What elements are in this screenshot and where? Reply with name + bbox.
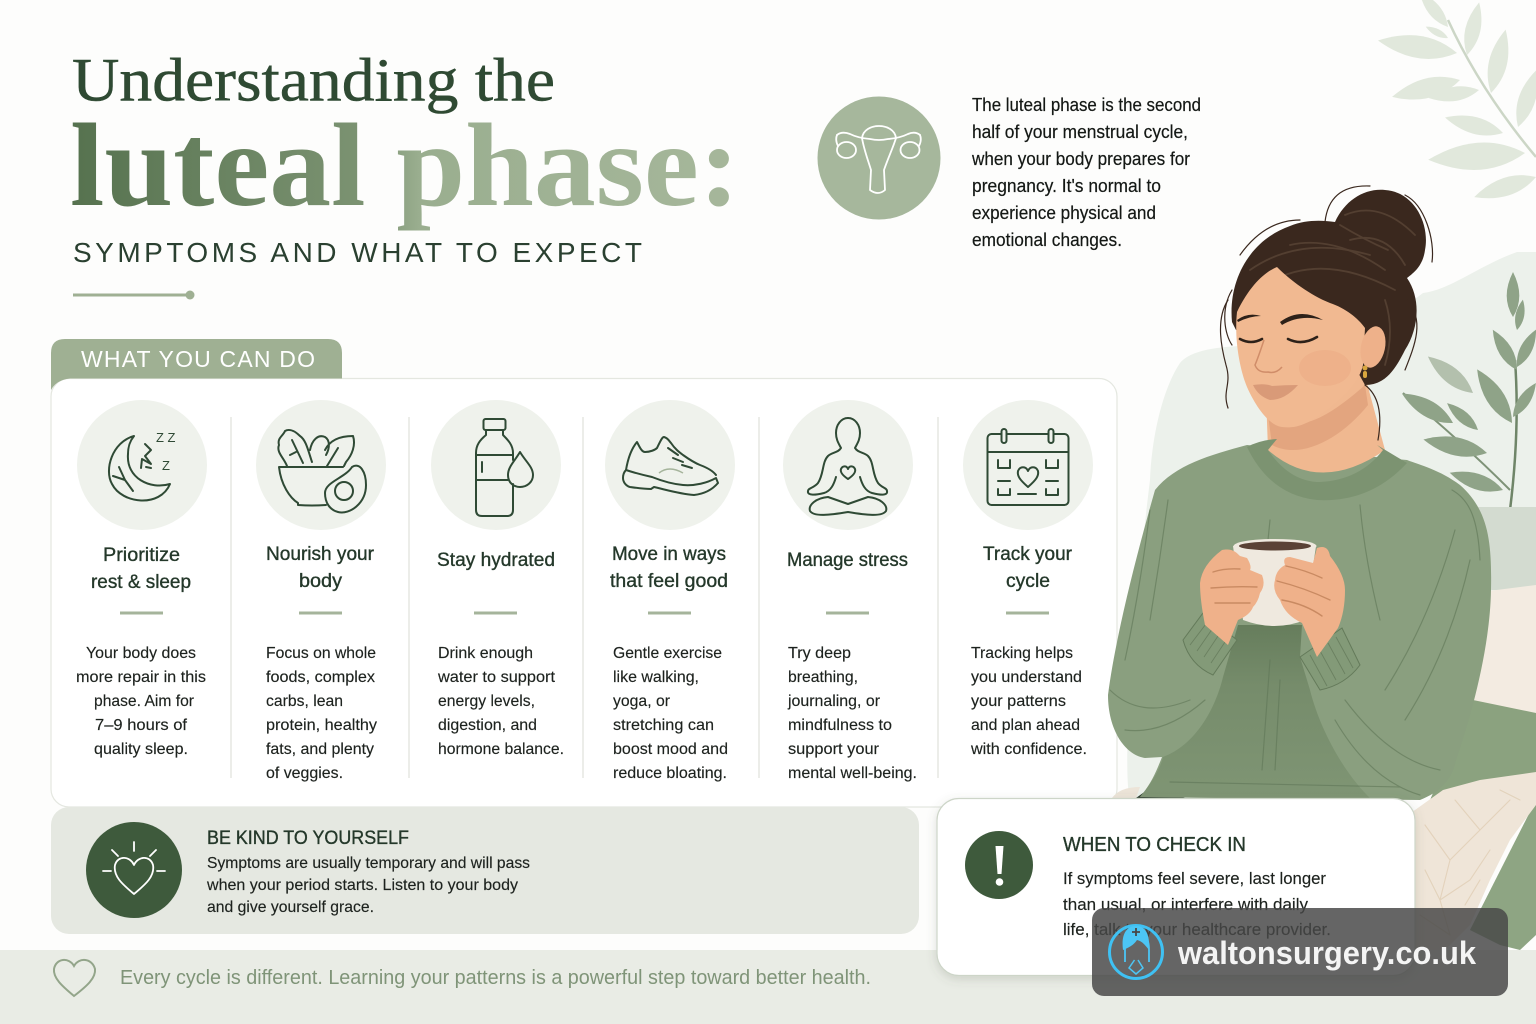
description bbox=[76, 645, 206, 758]
panel text bbox=[206, 855, 530, 916]
description: Your body does bbox=[86, 645, 196, 662]
pants bbox=[1136, 788, 1185, 798]
icon: moon and stars: Z Z bbox=[156, 430, 176, 445]
face bbox=[1236, 267, 1365, 427]
description: Try deep bbox=[788, 645, 851, 662]
heading: Move in ways bbox=[612, 544, 726, 565]
description bbox=[787, 645, 917, 782]
description bbox=[437, 645, 564, 758]
column: rest and sleep bbox=[76, 400, 207, 758]
column: stay hydrated bbox=[431, 400, 564, 758]
heading: body bbox=[299, 571, 343, 592]
panel text: Symptoms are usually temporary and will pass bbox=[207, 855, 530, 872]
heading bbox=[266, 544, 375, 592]
description: stretching can bbox=[613, 717, 714, 734]
heading bbox=[610, 544, 728, 592]
column: nourish your body bbox=[256, 400, 386, 782]
footer message bbox=[54, 960, 871, 996]
intro paragraph: pregnancy. It's normal to bbox=[972, 176, 1161, 196]
description bbox=[970, 645, 1087, 758]
description: journaling, or bbox=[787, 693, 881, 710]
panel heading: BE KIND TO YOURSELF bbox=[207, 828, 409, 849]
watermark badge bbox=[1092, 908, 1508, 996]
accent bar bbox=[474, 612, 517, 614]
description: fats, and plenty bbox=[266, 741, 374, 758]
column: manage stress bbox=[783, 400, 917, 782]
panel text: when your period starts. Listen to your body bbox=[206, 877, 518, 894]
illustration: potted plant bbox=[1398, 272, 1536, 590]
description: carbs, lean bbox=[266, 693, 343, 710]
description: digestion, and bbox=[438, 717, 537, 734]
intro paragraph bbox=[971, 95, 1201, 250]
description: Focus on whole bbox=[266, 645, 376, 662]
panel text: life, talk to your healthcare provider. bbox=[1063, 920, 1331, 939]
intro paragraph: experience physical and bbox=[972, 203, 1156, 223]
hair highlights bbox=[1250, 210, 1415, 365]
accent bar bbox=[826, 612, 869, 614]
footer text: Every cycle is different. Learning your patterns is a powerful step toward better health. bbox=[120, 967, 871, 989]
icon: exclamation badge bbox=[965, 831, 1033, 899]
nose bbox=[1255, 340, 1282, 372]
icon: heart outline bbox=[54, 960, 95, 996]
intro paragraph: emotional changes. bbox=[972, 230, 1122, 250]
icon: moon and stars: Z bbox=[162, 458, 170, 473]
sweater bbox=[1108, 445, 1491, 800]
description: protein, healthy bbox=[266, 717, 377, 734]
column: move in ways bbox=[605, 400, 735, 782]
description: you understand bbox=[971, 669, 1082, 686]
description: with confidence. bbox=[970, 741, 1087, 758]
hair back mass bbox=[1232, 190, 1426, 385]
neck bbox=[1266, 372, 1385, 472]
description: hormone balance. bbox=[438, 741, 564, 758]
title bbox=[70, 48, 740, 268]
watermark text: waltonsurgery.co.uk bbox=[1177, 935, 1476, 971]
illustration: woman with mug bbox=[1108, 186, 1491, 800]
heading: that feel good bbox=[610, 571, 728, 592]
brows bbox=[1237, 314, 1323, 325]
illustration: watercolor backdrop bbox=[1127, 252, 1536, 800]
description: of veggies. bbox=[266, 765, 343, 782]
left hand bbox=[1200, 549, 1264, 645]
description: reduce bloating. bbox=[613, 765, 727, 782]
right hand bbox=[1274, 547, 1345, 657]
heading bbox=[91, 545, 191, 593]
heading: Stay hydrated bbox=[437, 550, 555, 571]
ear bbox=[1357, 324, 1389, 370]
heading: Manage stress bbox=[787, 550, 908, 571]
mug bbox=[1233, 539, 1316, 626]
illustration: green pillow bbox=[1470, 800, 1536, 950]
panel: be kind to yourself bbox=[51, 807, 919, 934]
smile bbox=[1253, 384, 1298, 400]
right cuff bbox=[1300, 628, 1360, 690]
panel: what you can do card bbox=[51, 378, 1117, 807]
description: energy levels, bbox=[438, 693, 535, 710]
footer band bbox=[0, 950, 1536, 1024]
stray hair strands bbox=[1220, 186, 1433, 440]
description: mental well-being. bbox=[788, 765, 917, 782]
heading: Track your bbox=[983, 544, 1073, 565]
description: more repair in this bbox=[76, 669, 206, 686]
accent bar bbox=[1006, 612, 1049, 614]
description: support your bbox=[788, 741, 880, 758]
panel: when to check in bbox=[937, 798, 1415, 976]
neck shadow bbox=[1266, 385, 1368, 450]
description: boost mood and bbox=[613, 741, 728, 758]
icon: meditating figure with heart bbox=[783, 400, 913, 530]
intro paragraph: when your body prepares for bbox=[971, 149, 1190, 169]
tab heading: what you can do: WHAT YOU CAN DO bbox=[81, 346, 315, 372]
description: phase. Aim for bbox=[94, 693, 195, 710]
illustration: cream blanket bbox=[1470, 585, 1536, 715]
heading: Nourish your bbox=[266, 544, 375, 565]
tab heading: what you can do bbox=[51, 339, 342, 390]
description: mindfulness to bbox=[788, 717, 892, 734]
heading: rest & sleep bbox=[91, 572, 191, 593]
panel text: than usual, or interfere with daily bbox=[1063, 895, 1308, 914]
description: your patterns bbox=[971, 693, 1066, 710]
illustration: cream patterned pillow bbox=[1400, 772, 1536, 950]
description: foods, complex bbox=[266, 669, 375, 686]
description: 7–9 hours of bbox=[95, 717, 188, 734]
title line 2: luteal phase: bbox=[70, 99, 740, 231]
description: like walking, bbox=[613, 669, 699, 686]
accent bar bbox=[120, 612, 163, 614]
panel text bbox=[1063, 869, 1331, 939]
torso shade bbox=[1140, 625, 1372, 800]
illustration: leafy branch top right bbox=[1376, 0, 1536, 206]
description: yoga, or bbox=[613, 693, 671, 710]
intro paragraph: The luteal phase is the second bbox=[972, 95, 1201, 115]
description bbox=[266, 645, 377, 782]
title accent line bbox=[73, 290, 194, 300]
heading bbox=[983, 544, 1073, 592]
description: Gentle exercise bbox=[613, 645, 722, 662]
floor patch bbox=[1112, 787, 1140, 798]
icon: moon and stars bbox=[77, 400, 207, 530]
icon: nurse logo bbox=[1110, 926, 1162, 978]
blush bbox=[1299, 350, 1351, 386]
subtitle: SYMPTOMS AND WHAT TO EXPECT bbox=[73, 237, 642, 268]
icon: calendar with heart bbox=[963, 400, 1093, 530]
accent bar bbox=[299, 612, 342, 614]
closed eyes bbox=[1240, 337, 1317, 342]
heading: Prioritize bbox=[103, 545, 180, 566]
heading: cycle bbox=[1006, 571, 1050, 592]
earring bbox=[1362, 366, 1368, 378]
panel heading: WHEN TO CHECK IN bbox=[1063, 834, 1246, 856]
accent bar bbox=[648, 612, 691, 614]
description: water to support bbox=[437, 669, 556, 686]
column: track your cycle bbox=[963, 400, 1093, 758]
title line 1: Understanding the bbox=[72, 48, 555, 114]
icon: salad bowl and avocado bbox=[256, 400, 386, 530]
icon: uterus badge bbox=[818, 96, 940, 220]
description bbox=[613, 645, 728, 782]
description: Drink enough bbox=[438, 645, 533, 662]
description: Tracking helps bbox=[971, 645, 1073, 662]
icon: heart with rays bbox=[86, 822, 182, 918]
description: and plan ahead bbox=[971, 717, 1080, 734]
description: breathing, bbox=[788, 669, 858, 686]
intro paragraph: half of your menstrual cycle, bbox=[972, 122, 1188, 142]
illustration: green cushion bbox=[1430, 700, 1536, 815]
icon: water bottle and drop bbox=[431, 400, 561, 530]
left cuff bbox=[1183, 613, 1237, 675]
icon: sneaker bbox=[605, 400, 735, 530]
panel text: and give yourself grace. bbox=[207, 899, 374, 916]
description: quality sleep. bbox=[94, 741, 188, 758]
panel text: If symptoms feel severe, last longer bbox=[1063, 869, 1326, 888]
collar bbox=[1247, 439, 1407, 500]
sweater fold lines bbox=[1110, 490, 1480, 795]
